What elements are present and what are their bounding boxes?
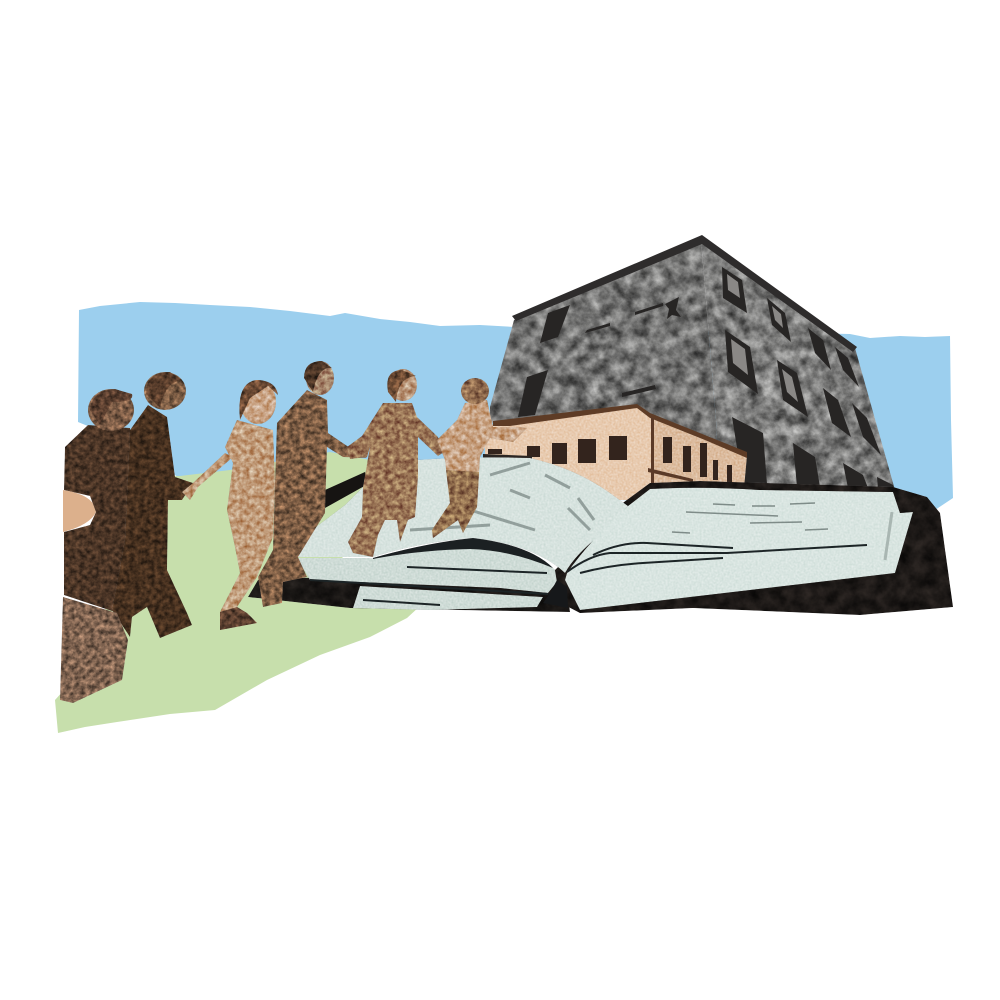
small building windows xyxy=(488,436,732,482)
window panes xyxy=(727,274,798,402)
torn blue sky paper xyxy=(78,302,953,510)
lower page stack, left xyxy=(297,540,557,593)
building windows, right face xyxy=(722,267,894,490)
foreground torn figure: tan hat xyxy=(63,490,96,532)
book text marks, right page xyxy=(672,503,828,533)
building stone walls xyxy=(490,240,895,500)
book dark stripe, left xyxy=(325,472,368,508)
person 1 in dark suit xyxy=(64,389,135,612)
building windows, left face xyxy=(518,297,681,417)
left page dark crescent xyxy=(373,538,553,568)
small building roof xyxy=(493,404,747,458)
book dark cover xyxy=(248,481,953,615)
foreground torn figure: lower body xyxy=(60,597,128,703)
person 5, woman in long dress xyxy=(347,369,447,557)
book text marks, left page xyxy=(410,463,594,530)
person 4, man in brown suit xyxy=(258,361,367,607)
building: small beige xyxy=(485,404,747,500)
torn green grass paper xyxy=(55,452,420,733)
small building corner and ledge xyxy=(648,418,693,488)
book page lines xyxy=(310,543,867,605)
people group xyxy=(60,361,527,703)
building: large grey xyxy=(490,235,895,500)
small building walls xyxy=(485,407,747,500)
dark edge behind left page xyxy=(483,454,532,462)
right page xyxy=(565,488,913,610)
right page edge shading xyxy=(885,512,892,560)
person 2 in dark suit xyxy=(112,372,193,638)
lowest page stack, left xyxy=(353,586,543,610)
left page xyxy=(295,457,628,573)
building roof edge xyxy=(512,235,857,352)
person 3, woman in tan dress xyxy=(182,380,278,630)
open book xyxy=(248,454,953,615)
person 6, woman seen from behind xyxy=(432,378,527,538)
book spine shadow xyxy=(543,580,568,608)
book pages xyxy=(295,457,913,610)
